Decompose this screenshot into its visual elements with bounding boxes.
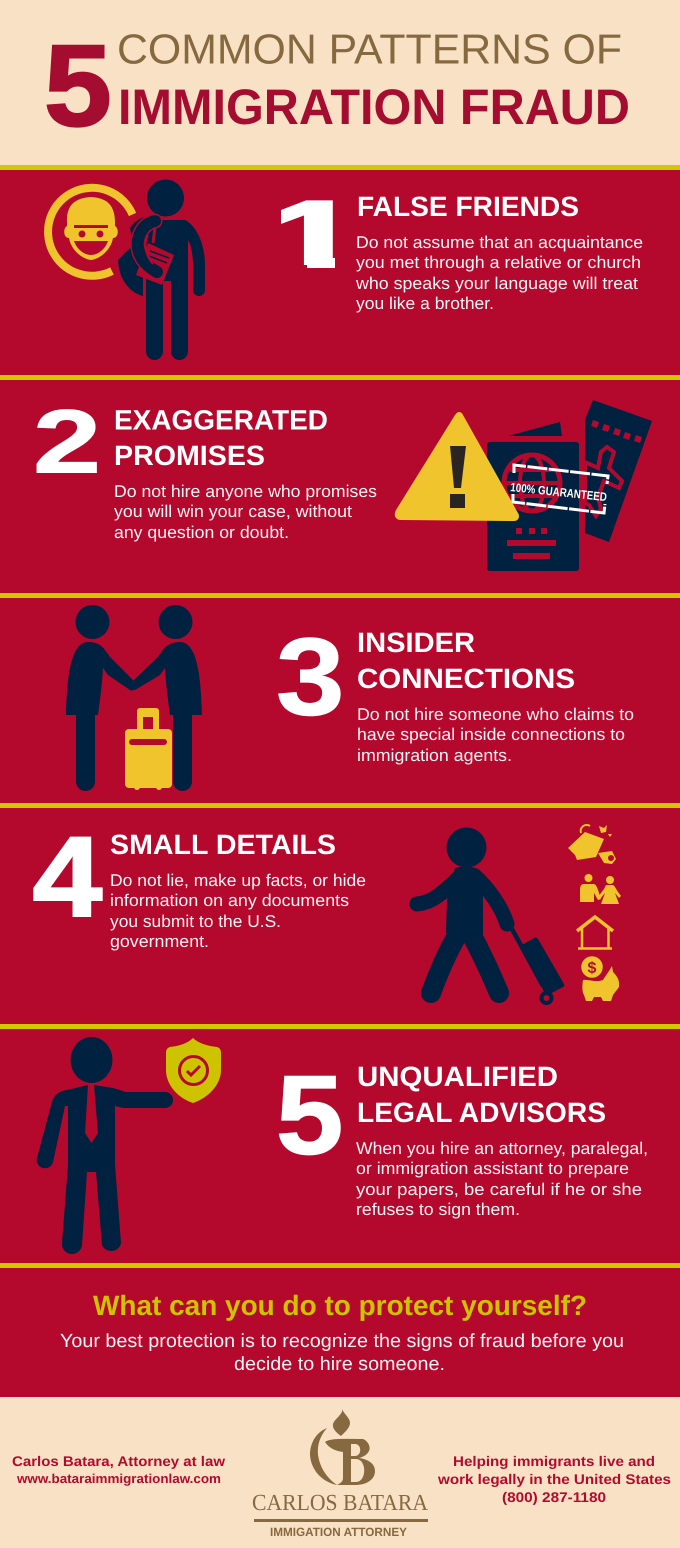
heading: SMALL DETAILS <box>110 829 336 860</box>
text block: any question or doubt. <box>114 523 289 542</box>
text block <box>110 871 366 951</box>
text block: or immigration assistant to prepare <box>356 1159 629 1178</box>
contact right: (800) 287-1180 <box>502 1489 606 1505</box>
text block: Do not hire someone who claims to <box>357 705 634 724</box>
text block: who speaks your language will treat <box>355 274 638 293</box>
logo: CARLOS BATARA <box>252 1490 428 1515</box>
icon: two men shaking hands <box>66 605 202 791</box>
heading <box>357 627 575 694</box>
heading: CONNECTIONS <box>357 663 575 694</box>
icon: whistle <box>568 825 616 864</box>
heading <box>114 404 328 471</box>
number 5: 5 <box>276 1052 343 1178</box>
number 3: 3 <box>276 616 345 738</box>
text block: you met through a relative or church <box>356 253 641 272</box>
number 1 <box>281 200 335 268</box>
icon: passport <box>487 422 579 571</box>
icon: piggy bank <box>580 956 619 1001</box>
panel: insider connections <box>66 605 634 791</box>
contact right <box>437 1453 671 1505</box>
contact left <box>12 1453 225 1486</box>
text block: government. <box>110 932 209 951</box>
title <box>44 20 630 150</box>
heading: INSIDER <box>357 627 475 658</box>
text block: refuses to sign them. <box>356 1200 520 1219</box>
heading: UNQUALIFIED <box>357 1061 558 1092</box>
text block: you submit to the U.S. <box>110 912 281 931</box>
icon: yellow suitcase <box>125 708 172 790</box>
heading: LEGAL ADVISORS <box>357 1097 606 1128</box>
number 4: 4 <box>32 814 102 941</box>
icon: shield <box>166 1038 221 1103</box>
title: COMMON PATTERNS OF <box>117 26 622 72</box>
icon: guaranteed stamp: 100% GUARANTEED <box>510 480 608 504</box>
icon: warning triangle <box>395 412 519 521</box>
text block <box>356 1139 648 1219</box>
text block: Do not hire anyone who promises <box>114 482 377 501</box>
contact right: Helping immigrants live and <box>453 1453 655 1469</box>
title: 5 <box>44 20 112 150</box>
text block: you will win your case, without <box>114 502 352 521</box>
number 1: 1 <box>258 176 369 308</box>
text block: information on any documents <box>110 891 349 910</box>
icon: guaranteed stamp <box>510 465 608 513</box>
heading: What can you do to protect yourself? <box>93 1290 587 1321</box>
text block <box>355 233 643 313</box>
contact right: work legally in the United States <box>437 1471 671 1487</box>
heading <box>357 1061 606 1128</box>
panel: exaggerated promises <box>33 392 652 571</box>
text block: you like a brother. <box>356 294 494 313</box>
logo <box>252 1408 428 1539</box>
panel: protect yourself <box>60 1290 624 1375</box>
text block <box>60 1331 624 1375</box>
text block: Do not assume that an acquaintance <box>356 233 643 252</box>
panel: footer <box>12 1408 671 1539</box>
text block: immigration agents. <box>357 746 512 765</box>
text block: When you hire an attorney, paralegal, <box>356 1139 648 1158</box>
icon: piggy bank: $ <box>588 960 597 977</box>
number 2: 2 <box>33 392 101 492</box>
icon: house <box>577 917 613 948</box>
icon: couple <box>580 874 621 904</box>
text block: your papers, be careful if he or she <box>356 1180 642 1199</box>
panel: small details <box>32 814 621 1003</box>
panel: false friends <box>48 176 643 360</box>
icon: man with backpack <box>118 180 205 360</box>
panel: unqualified legal advisors <box>37 1037 648 1254</box>
heading: PROMISES <box>114 440 265 471</box>
text block: Your best protection is to recognize the signs of fraud before you <box>60 1331 624 1352</box>
icon: man in suit <box>37 1037 173 1254</box>
logo: IMMIGATION ATTORNEY <box>270 1525 407 1539</box>
text block <box>114 482 377 542</box>
icon: walking man with suitcase <box>417 828 564 1003</box>
text block: Do not lie, make up facts, or hide <box>110 871 366 890</box>
title: IMMIGRATION FRAUD <box>118 79 630 135</box>
icon: masked fraudster in yellow ring <box>48 188 132 276</box>
contact left: Carlos Batara, Attorney at law <box>12 1453 225 1469</box>
text block: decide to hire someone. <box>234 1354 445 1375</box>
text block <box>357 705 634 765</box>
heading: EXAGGERATED <box>114 404 328 436</box>
text block: have special inside connections to <box>357 725 625 744</box>
contact left: www.bataraimmigrationlaw.com <box>16 1471 221 1486</box>
heading: FALSE FRIENDS <box>357 191 579 222</box>
icon: ticket <box>585 400 652 542</box>
